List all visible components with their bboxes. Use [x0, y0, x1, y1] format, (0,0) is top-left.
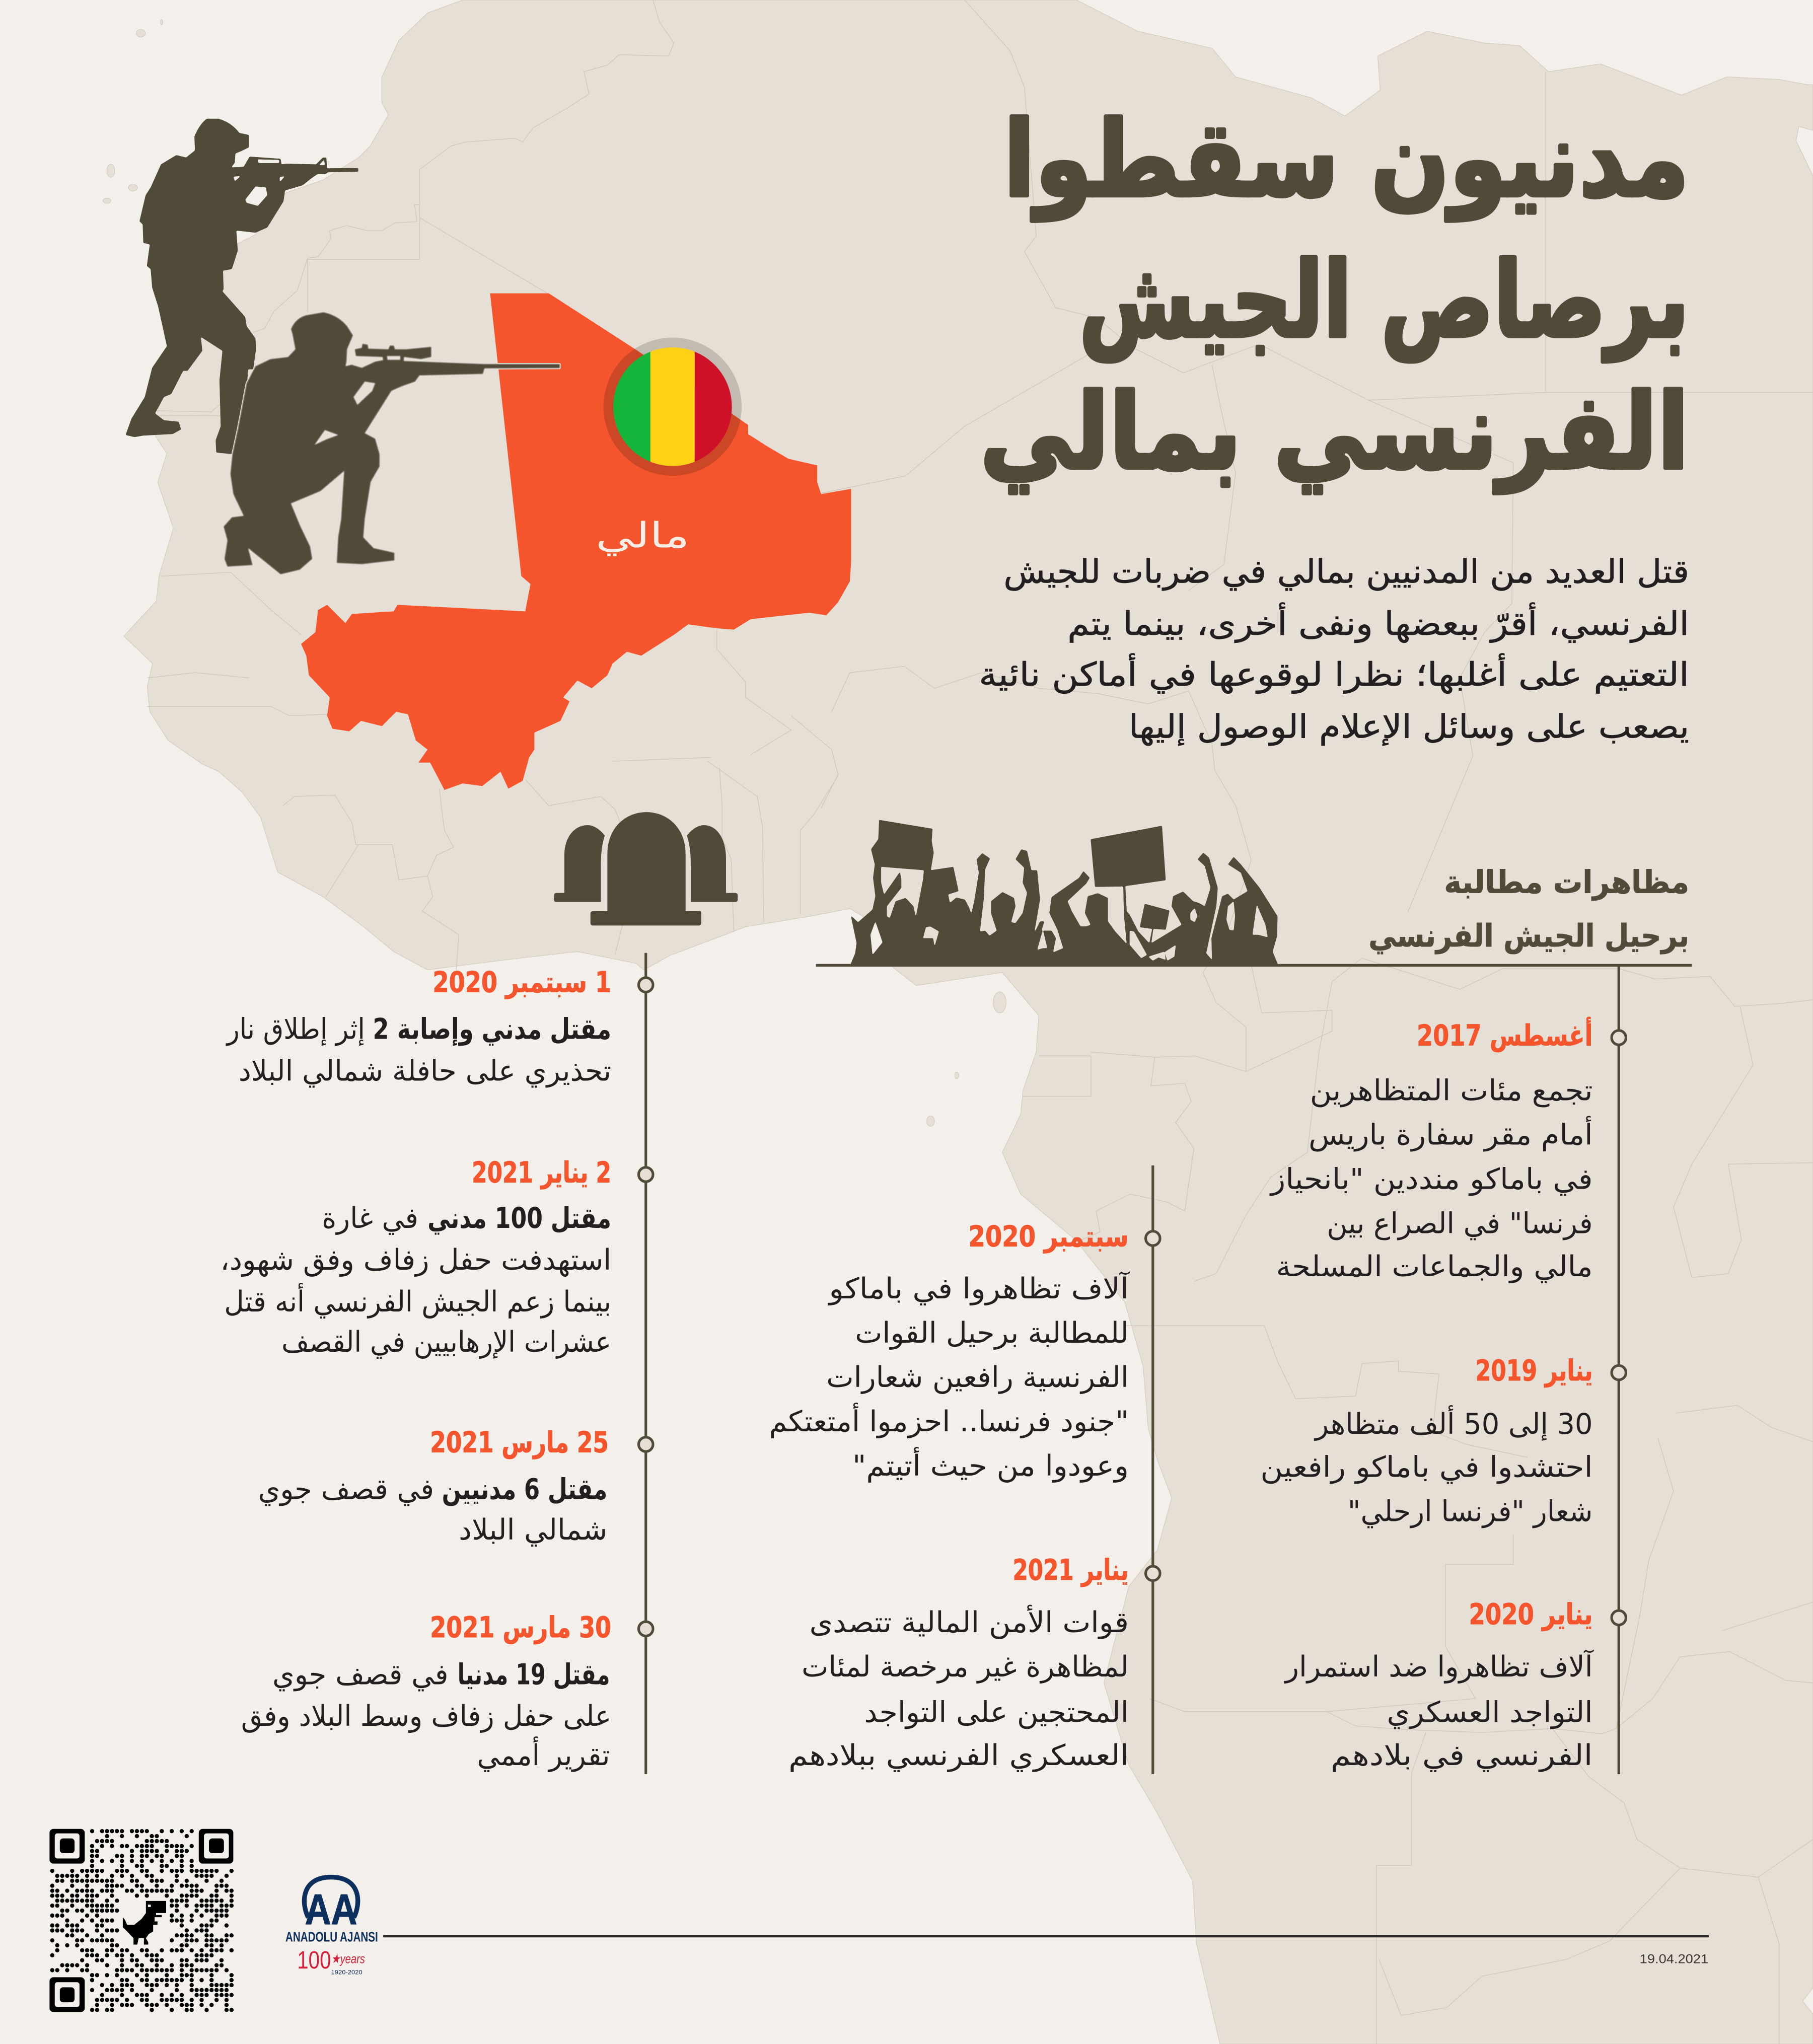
event: January 2021: العسكري الفرنسي ببلادهم	[788, 1739, 1129, 1772]
event: 2 January 2021	[221, 1156, 653, 1359]
logo: Anadolu Ajansi: AA	[305, 1886, 357, 1934]
event: January 2020: الفرنسي في بلادهم	[1331, 1739, 1592, 1772]
event: August 2017: تجمع مئات المتظاهرين	[1310, 1074, 1592, 1107]
publication date: 19.04.2021	[1640, 1952, 1708, 1966]
event: 2 January 2021: مقتل 100 مدني	[427, 1202, 611, 1235]
title	[980, 99, 1689, 494]
event: January 2019: احتشدوا في باماكو رافعين	[1260, 1451, 1592, 1484]
title: الفرنسي بمالي	[980, 372, 1689, 494]
event: 1 September 2020: 1 سبتمبر 2020	[432, 966, 611, 999]
event: August 2017: مالي والجماعات المسلحة	[1276, 1250, 1592, 1283]
event: 30 March 2021: على حفل زفاف وسط البلاد وفق	[241, 1700, 611, 1733]
event: 1 September 2020: إثر إطلاق نار	[226, 1013, 365, 1047]
event: January 2021: المحتجين على التواجد	[864, 1696, 1129, 1729]
event: 25 March 2021: شمالي البلاد	[459, 1513, 607, 1547]
timeline: civilian casualties left column	[221, 953, 653, 1774]
logo: Anadolu Ajansi: 1920-2020	[331, 1968, 362, 1976]
event: 25 March 2021	[258, 1426, 653, 1547]
event: August 2017: أمام مقر سفارة باريس	[1309, 1116, 1592, 1151]
icon: kneeling sniper silhouette	[224, 312, 560, 574]
QR code with dinosaur	[49, 1829, 233, 2012]
horizontal rule under crowd	[816, 965, 1692, 966]
event: September 2020: آلاف تظاهروا في باماكو	[827, 1271, 1130, 1305]
event: January 2020: يناير 2020	[1469, 1598, 1592, 1631]
event: 2 January 2021: 2 يناير 2021	[472, 1156, 611, 1189]
event: August 2017	[1269, 1017, 1626, 1283]
icon: protest crowd silhouette	[850, 820, 1278, 966]
icon: pixel dinosaur	[123, 1901, 166, 1944]
intro text block: الفرنسي، أقرّ ببعضها ونفى أخرى، بينما يتم	[1067, 602, 1689, 643]
event: 2 January 2021: عشرات الإرهابيين في القصف	[281, 1326, 611, 1359]
event: 30 March 2021: مقتل 19 مدنيا	[458, 1658, 610, 1691]
event: September 2020: وعودوا من حيث أتيتم"	[852, 1447, 1129, 1483]
event: January 2021: قوات الأمن المالية تتصدى	[810, 1604, 1129, 1639]
event: January 2021: يناير 2021	[1012, 1554, 1129, 1587]
event: August 2017: أغسطس 2017	[1417, 1017, 1592, 1053]
footer line	[383, 1936, 1709, 1937]
intro text block: يصعب على وسائل الإعلام الوصول إليها	[1129, 708, 1689, 746]
event: January 2021: لمظاهرة غير مرخصة لمئات	[802, 1650, 1129, 1684]
intro text block	[979, 553, 1689, 746]
event: 2 January 2021: في غارة	[322, 1202, 418, 1235]
title: مدنيون سقطوا	[1003, 99, 1689, 221]
timeline: protests right column	[1260, 965, 1626, 1774]
event: 25 March 2021: مقتل 6 مدنيين	[442, 1473, 607, 1506]
intro text block: التعتيم على أغلبها؛ نظرا لوقوعها في أماكن نائية	[979, 653, 1689, 694]
event: January 2020: آلاف تظاهروا ضد استمرار	[1284, 1649, 1594, 1684]
intro text block: قتل العديد من المدنيين بمالي في ضربات للجيش	[1003, 553, 1689, 591]
event: 2 January 2021: استهدفت حفل زفاف وفق شهود،	[221, 1244, 611, 1277]
logo: Anadolu Ajansi: ★years	[331, 1952, 365, 1966]
event: 1 September 2020: تحذيري على حافلة شمالي البلاد	[239, 1055, 611, 1088]
event: 30 March 2021: تقرير أممي	[477, 1736, 610, 1772]
event: 25 March 2021: في قصف جوي	[258, 1473, 434, 1506]
event: September 2020: سبتمبر 2020	[968, 1220, 1129, 1253]
protests heading: برحيل الجيش الفرنسي	[1368, 917, 1689, 954]
event: 30 March 2021	[241, 1611, 653, 1772]
icon: standing soldier silhouette	[125, 119, 358, 454]
icon: gravestones	[554, 812, 738, 925]
event: 2 January 2021: بينما زعم الجيش الفرنسي أنه قتل	[224, 1283, 611, 1319]
event: January 2021	[788, 1554, 1160, 1772]
protests heading: مظاهرات مطالبة	[1444, 864, 1689, 901]
event: September 2020: "جنود فرنسا.. احزموا أمتعتكم	[769, 1403, 1129, 1438]
event: January 2020	[1284, 1598, 1626, 1772]
map of Mali	[301, 294, 851, 790]
event: 1 September 2020: مقتل مدني وإصابة 2	[373, 1013, 611, 1047]
logo: Anadolu Ajansi: 100	[297, 1946, 331, 1974]
event: September 2020: للمطالبة برحيل القوات	[855, 1317, 1129, 1350]
protests heading	[1368, 864, 1689, 954]
label: Mali: مالي	[596, 515, 689, 557]
logo: Anadolu Ajansi: ANADOLU AJANSI	[285, 1929, 378, 1945]
event: January 2019: يناير 2019	[1476, 1354, 1592, 1388]
icon: Mali flag badge	[604, 338, 742, 476]
event: August 2017: في باماكو منددين "بانحياز	[1269, 1162, 1592, 1196]
event: 30 March 2021: 30 مارس 2021	[430, 1611, 611, 1644]
event: August 2017: فرنسا" في الصراع بين	[1327, 1207, 1592, 1240]
event: September 2020	[769, 1220, 1160, 1483]
logo: Anadolu Ajansi	[285, 1877, 378, 1976]
event: January 2019: 30 إلى 50 ألف متظاهر	[1314, 1405, 1592, 1441]
event: January 2019: شعار "فرنسا ارحلي"	[1348, 1495, 1592, 1528]
timeline: protests middle column	[769, 1165, 1160, 1774]
event: 30 March 2021: في قصف جوي	[272, 1658, 449, 1691]
event: September 2020: الفرنسية رافعين شعارات	[826, 1361, 1129, 1394]
event: 25 March 2021: 25 مارس 2021	[430, 1426, 609, 1459]
event: January 2019	[1260, 1354, 1626, 1528]
event: January 2020: التواجد العسكري	[1387, 1696, 1592, 1729]
event: 1 September 2020	[226, 966, 653, 1088]
